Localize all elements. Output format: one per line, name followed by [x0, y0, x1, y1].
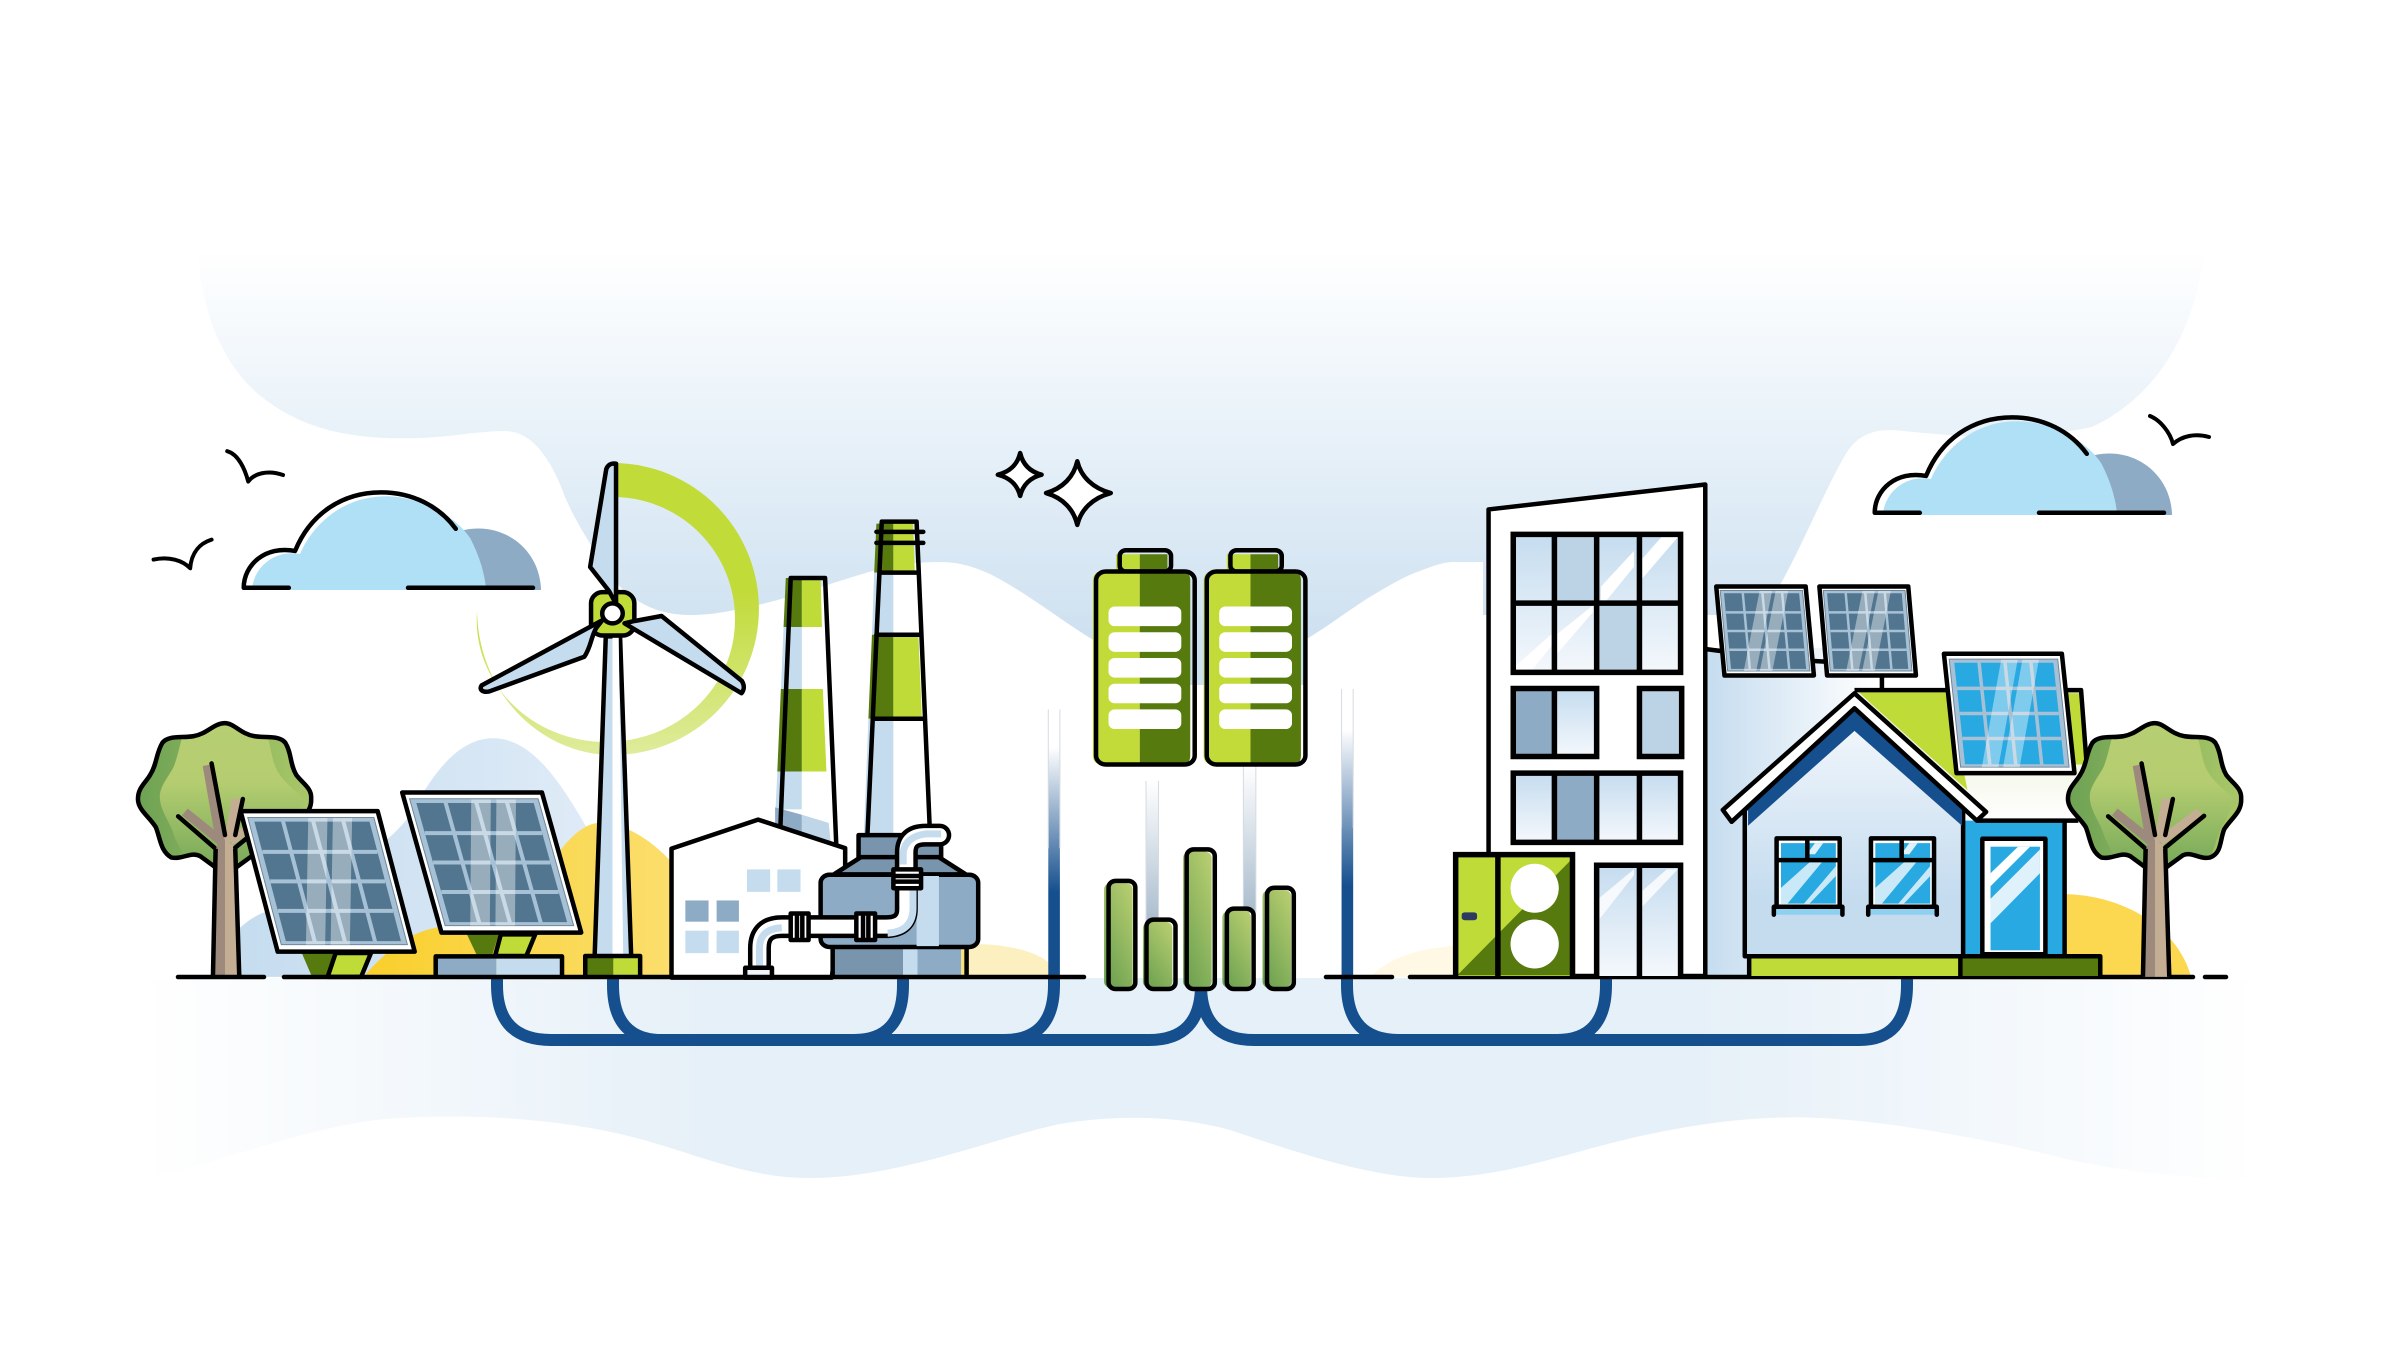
house	[1723, 690, 2100, 976]
chimney front	[864, 522, 930, 834]
ground line	[178, 975, 2226, 979]
bar chart	[1104, 849, 1294, 989]
wind turbine	[481, 464, 744, 977]
window block: middle left	[1513, 689, 1597, 757]
panel connectors	[1705, 649, 1882, 691]
house roof back	[1854, 690, 2087, 821]
hill: yellow behind turbine	[363, 823, 671, 977]
hill: yellow by house	[2065, 894, 2191, 976]
building solar panel B	[1819, 587, 1916, 675]
underground power lines	[497, 978, 1907, 1040]
window block: middle right	[1639, 689, 1682, 757]
house roof edge	[1723, 693, 1986, 822]
solar panel 1	[241, 811, 415, 952]
building solar panel A	[1716, 587, 1814, 675]
tree left	[138, 721, 311, 977]
connector lines to grid	[1048, 689, 1353, 979]
house blue trim	[1748, 711, 1962, 826]
solar panel 2	[402, 792, 581, 933]
cloud right	[1875, 417, 2172, 515]
roof solar panel	[1944, 654, 2074, 773]
storage tank	[821, 835, 978, 978]
house wall	[1745, 713, 1963, 956]
window block: lower	[1513, 773, 1681, 842]
hill: blue behind solar panels	[236, 738, 587, 977]
birds left	[154, 451, 283, 568]
window block: top	[1513, 534, 1681, 672]
green ring around turbine	[477, 463, 759, 755]
hill: pale yellow by factory	[966, 944, 1051, 978]
background: sky cloud shape	[198, 250, 2204, 685]
hill: pale yellow by building	[1370, 945, 1465, 977]
tree right	[2068, 721, 2241, 977]
background: underground wave band	[140, 978, 2260, 1180]
house window right	[1868, 838, 1937, 915]
building door	[1597, 865, 1681, 976]
chimney back	[775, 578, 836, 844]
solar panel stands	[302, 934, 562, 977]
heat pump	[1456, 855, 1573, 976]
background: gradient behind house	[1706, 648, 1875, 978]
cloud left	[244, 492, 541, 590]
office building	[1489, 485, 1705, 976]
sparkle small	[998, 453, 1042, 496]
battery 1	[1093, 550, 1195, 765]
house annex	[1963, 821, 2078, 955]
factory building	[672, 820, 845, 978]
pipes	[745, 834, 941, 978]
house plinth	[1749, 956, 2100, 976]
bird right	[2150, 416, 2209, 444]
house window left	[1774, 838, 1842, 915]
sparkle large	[1046, 461, 1111, 525]
battery 2	[1204, 550, 1305, 765]
